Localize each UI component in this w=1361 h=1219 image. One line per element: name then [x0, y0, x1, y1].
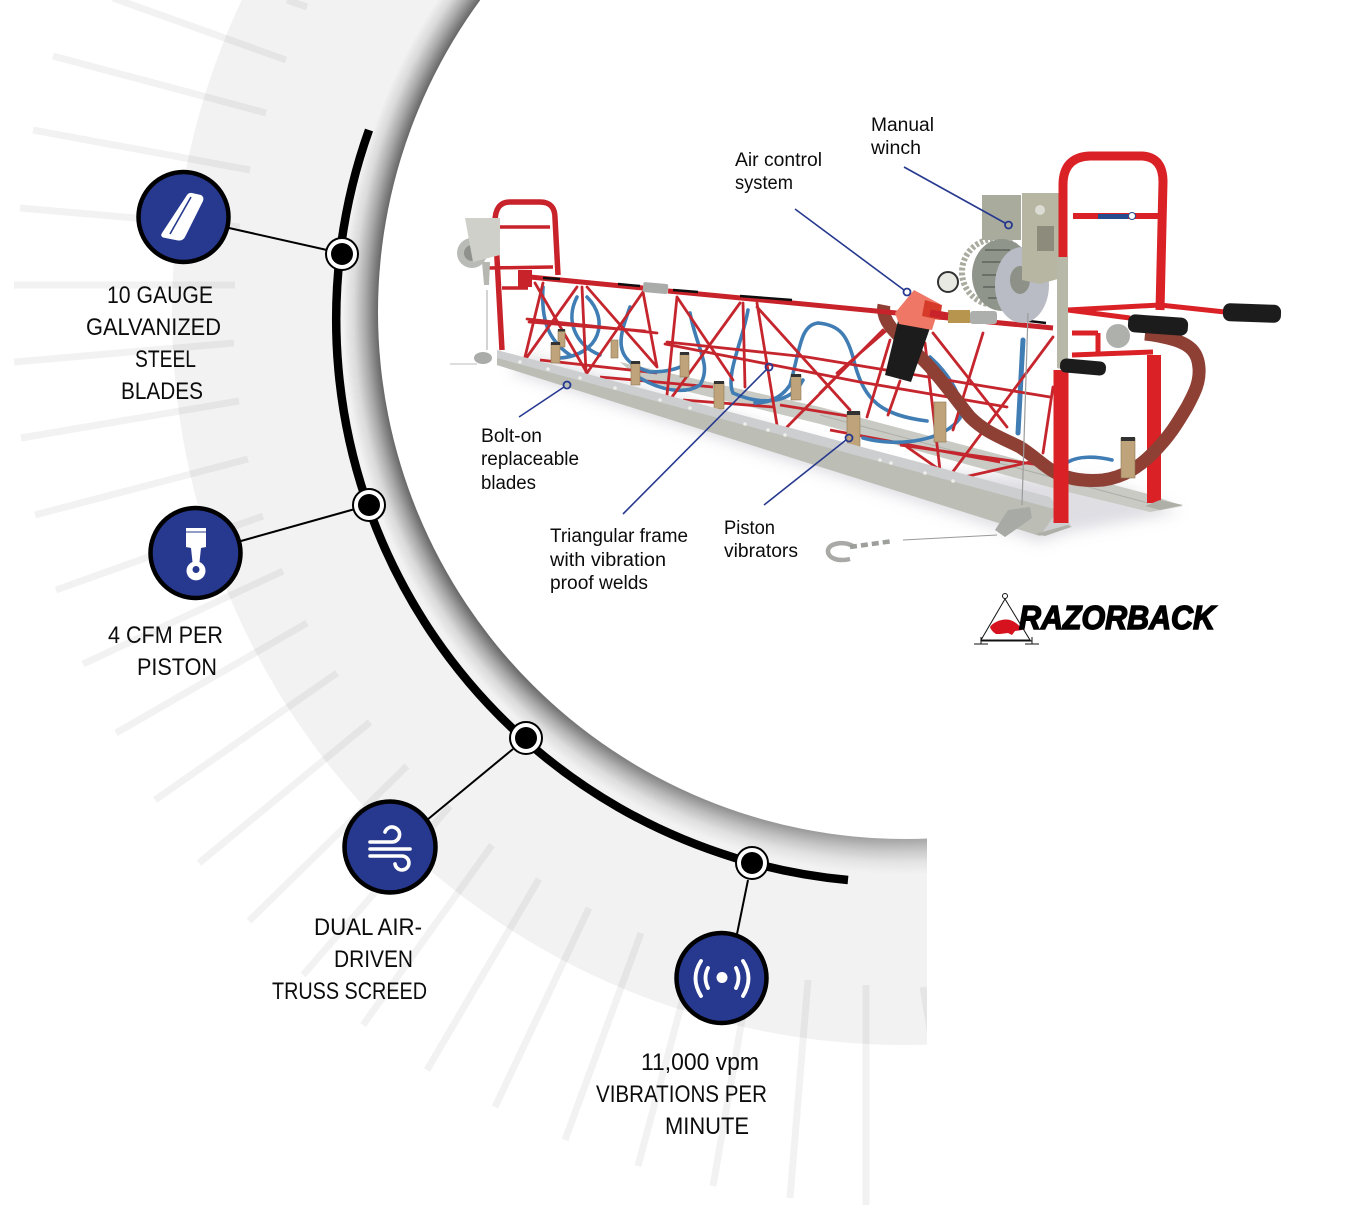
feature text: piston: PISTON — [137, 654, 217, 681]
callout: Air control system — [735, 150, 910, 296]
callout: Piston vibrators: vibrators — [724, 541, 798, 562]
icon: steel blade — [138, 172, 228, 262]
connector 1 — [229, 228, 327, 250]
callout: Triangular frame with vibration proof welds: Triangular frame — [550, 526, 688, 547]
ground shadow — [510, 355, 1180, 542]
feature text: blades: 10 GAUGE — [107, 282, 213, 309]
left winch — [450, 218, 500, 364]
cable and hook — [828, 313, 1032, 560]
callout: Bolt-on replaceable blades — [481, 382, 579, 494]
grey ring band — [172, 0, 927, 1045]
bottom truss rails — [540, 360, 1040, 478]
icon: wind — [344, 802, 436, 892]
feature text: vibrations: MINUTE — [665, 1113, 749, 1140]
Razorback logo — [974, 594, 1217, 644]
vibrators — [551, 329, 1135, 478]
feature text: air-driven: DUAL AIR- — [314, 914, 422, 941]
feature text: vibrations — [596, 1049, 767, 1140]
icon: vibration — [676, 933, 766, 1023]
product photo: truss screed illustration — [450, 156, 1281, 560]
callout: Bolt-on replaceable blades: Bolt-on — [481, 426, 542, 447]
callout: Bolt-on replaceable blades: replaceable — [481, 449, 579, 470]
truss frame — [525, 283, 1053, 473]
callout: Piston vibrators: Piston — [724, 518, 775, 539]
rear blade — [620, 362, 1183, 512]
callout: Bolt-on replaceable blades: blades — [481, 473, 536, 494]
front blade — [497, 350, 1072, 536]
callout: Air control system: system — [735, 173, 793, 194]
connector 2 — [241, 509, 355, 541]
feature text: blades: BLADES — [121, 378, 203, 405]
timeline node 2 — [353, 489, 385, 521]
radial tick marks — [14, 0, 940, 1205]
right frame rear column — [1147, 355, 1161, 503]
callout: Triangular frame with vibration proof welds — [549, 364, 772, 594]
callout: Piston vibrators — [724, 434, 852, 562]
top rail — [530, 277, 1053, 328]
feature text: vibrations: VIBRATIONS PER — [596, 1081, 767, 1108]
maroon air hose — [884, 305, 1199, 481]
icon: piston — [150, 508, 240, 598]
white product area — [378, 0, 1361, 839]
feature text: blades — [86, 282, 221, 405]
callout: Manual winch — [870, 115, 1012, 228]
feature text: vibrations: 11,000 vpm — [641, 1049, 759, 1076]
connector 3 — [427, 749, 513, 820]
timeline node 4 — [736, 847, 768, 879]
left handle frame — [488, 202, 558, 350]
feature text: piston: 4 CFM PER — [108, 622, 223, 649]
callout: Air control system: Air control — [735, 150, 822, 171]
feature text: blades: GALVANIZED — [86, 314, 221, 341]
feature text: piston — [108, 622, 223, 681]
callout: Triangular frame with vibration proof welds: with vibration — [549, 550, 666, 571]
inner shadow ring — [346, 0, 927, 868]
feature text: air-driven — [272, 914, 427, 1005]
crank arm and grips — [1057, 257, 1281, 376]
air control unit — [885, 272, 997, 382]
black timeline arc — [336, 130, 848, 880]
callout: Manual winch: winch — [870, 138, 921, 159]
logo triangle mark — [974, 594, 1039, 644]
blue air hoses — [543, 287, 1112, 462]
right handle frame — [1061, 156, 1225, 523]
logo red hog — [990, 619, 1022, 635]
main winch — [962, 193, 1065, 323]
feature text: air-driven: DRIVEN — [334, 946, 413, 973]
logo wordmark: RAZORBACK — [1019, 599, 1217, 636]
callout: Triangular frame with vibration proof welds: proof welds — [550, 573, 648, 594]
foot plates — [1035, 500, 1183, 536]
timeline node 1 — [326, 238, 358, 270]
feature text: air-driven: TRUSS SCREED — [272, 978, 427, 1005]
timeline node 3 — [510, 722, 542, 754]
connector 4 — [737, 880, 748, 934]
callout: Manual winch: Manual — [871, 115, 934, 136]
feature text: blades: STEEL — [135, 346, 196, 373]
